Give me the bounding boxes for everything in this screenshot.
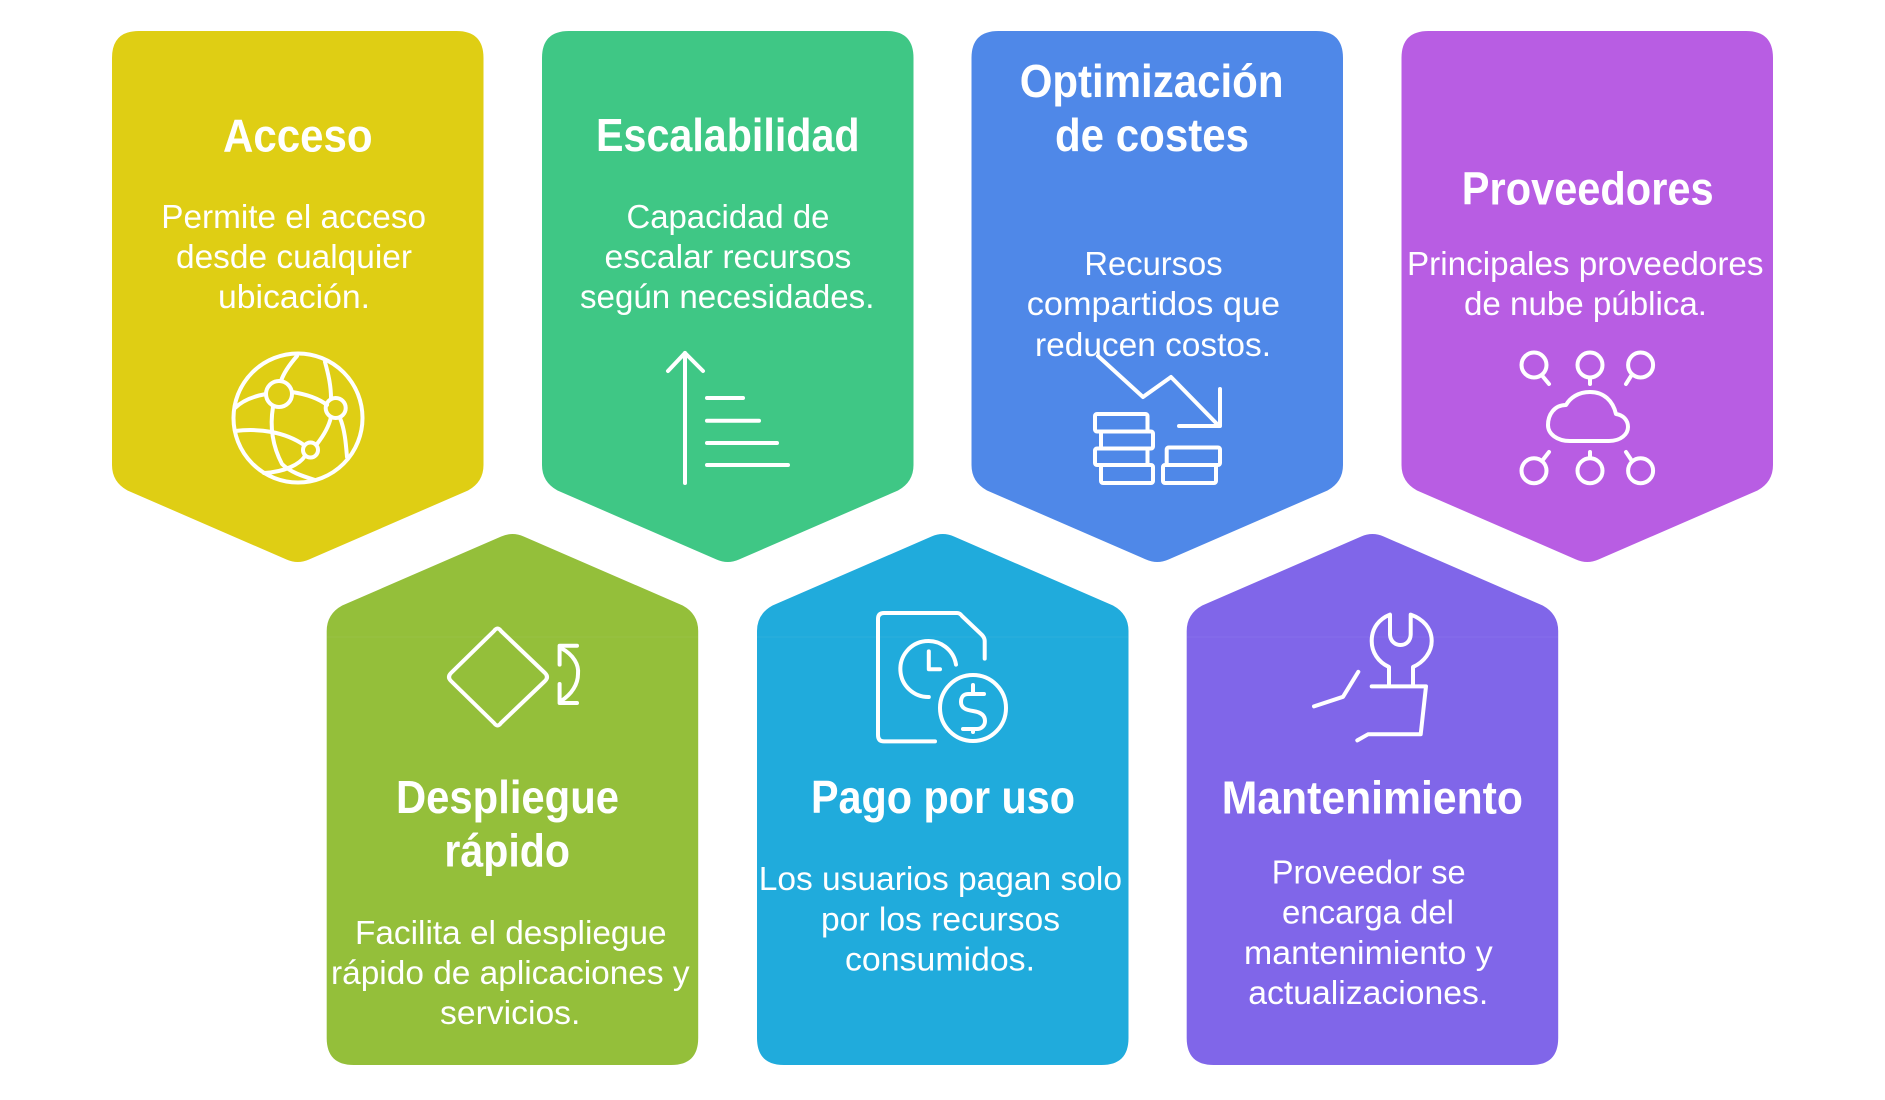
text block: Proveedores description bbox=[1407, 246, 1764, 323]
text block: Acceso description: desde cualquier bbox=[176, 239, 412, 276]
heading: Optimización de costes: Optimización bbox=[1020, 55, 1284, 107]
heading: Pago por uso: Pago por uso bbox=[811, 771, 1075, 823]
text block: Pago description: por los recursos bbox=[821, 902, 1060, 939]
heading: Acceso: Acceso bbox=[223, 110, 372, 162]
text block: Mantenimiento description: mantenimiento y bbox=[1244, 935, 1493, 972]
panel: Mantenimiento bbox=[1187, 534, 1558, 1065]
text block: Escalabilidad description: escalar recursos bbox=[604, 239, 851, 276]
icon: falling arrow and coins bbox=[1095, 356, 1220, 483]
text block: Mantenimiento description: Proveedor se bbox=[1272, 855, 1466, 892]
text block: costes description: Recursos bbox=[1084, 246, 1223, 283]
text block: Mantenimiento description bbox=[1244, 855, 1493, 1012]
text block: Mantenimiento description: actualizaciones. bbox=[1248, 975, 1488, 1012]
text block: Despliegue description: Facilita el despliegue bbox=[355, 915, 667, 952]
text block: costes description: compartidos que bbox=[1027, 286, 1280, 323]
text block: Acceso description bbox=[161, 199, 426, 316]
heading: Mantenimiento: Mantenimiento bbox=[1222, 772, 1523, 824]
icon: up arrow with bars bbox=[668, 353, 788, 483]
icon: cloud with connected nodes bbox=[1522, 352, 1653, 483]
text block: Proveedores description: Principales proveedores bbox=[1407, 246, 1764, 283]
text block: Mantenimiento description: encarga del bbox=[1282, 895, 1454, 932]
panel: Escalabilidad bbox=[542, 31, 914, 562]
text block: Proveedores description: de nube pública. bbox=[1464, 286, 1707, 323]
text block: Escalabilidad description: según necesidades. bbox=[580, 279, 874, 316]
text block: Pago description: consumidos. bbox=[845, 942, 1035, 979]
icon: globe network bbox=[234, 354, 362, 482]
icon: hand holding wrench bbox=[1314, 615, 1432, 740]
text block: Pago description: Los usuarios pagan solo bbox=[759, 861, 1122, 898]
icon: document with clock and dollar bbox=[878, 613, 1006, 741]
heading: Despliegue rápido: rápido bbox=[444, 824, 570, 876]
text block: costes description: reducen costos. bbox=[1035, 327, 1271, 364]
heading: Despliegue rápido: Despliegue bbox=[396, 771, 619, 823]
heading: Despliegue rápido bbox=[396, 771, 619, 876]
panel: Acceso bbox=[112, 31, 484, 562]
panel: Optimización de costes bbox=[972, 31, 1343, 562]
text block: costes description bbox=[1027, 246, 1280, 364]
panel: Pago por uso bbox=[757, 534, 1128, 1065]
icon: diamond with refresh arrows bbox=[449, 628, 578, 726]
text block: Acceso description: Permite el acceso bbox=[161, 199, 426, 236]
text block: Despliegue description bbox=[331, 915, 690, 1032]
text block: Despliegue description: servicios. bbox=[440, 995, 580, 1032]
heading: Proveedores: Proveedores bbox=[1462, 162, 1714, 214]
text block: Despliegue description: rápido de aplicaciones y bbox=[331, 955, 690, 992]
panel: Proveedores bbox=[1402, 31, 1773, 562]
heading: Escalabilidad: Escalabilidad bbox=[596, 109, 860, 161]
panel: Despliegue rápido bbox=[327, 534, 698, 1065]
text block: Escalabilidad description: Capacidad de bbox=[626, 199, 829, 236]
heading: Optimización de costes: de costes bbox=[1055, 109, 1249, 161]
heading: Optimización de costes bbox=[1020, 55, 1284, 161]
text block: Escalabilidad description bbox=[580, 199, 874, 316]
text block: Acceso description: ubicación. bbox=[218, 279, 370, 316]
text block: Pago description bbox=[759, 861, 1122, 979]
